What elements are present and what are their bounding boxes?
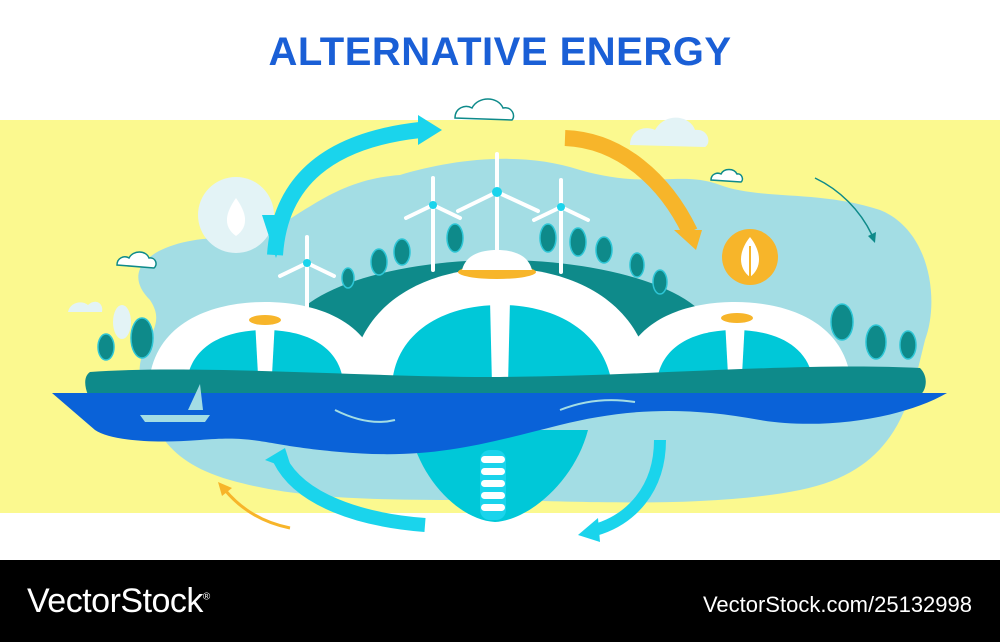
arrows: [262, 115, 442, 258]
underwater pod: [410, 430, 588, 522]
footer brand: VectorStock®: [27, 582, 210, 620]
footer: [0, 560, 1000, 642]
water: [52, 393, 947, 454]
trees: [98, 224, 916, 360]
title: ALTERNATIVE ENERGY: [268, 30, 732, 74]
clouds: [117, 99, 742, 268]
background blob: [138, 159, 931, 503]
ground strip: [85, 367, 926, 395]
domes: [150, 250, 850, 385]
footer url: VectorStock.com/25132998: [703, 592, 972, 617]
boat: [140, 384, 210, 422]
central hill: [285, 260, 715, 420]
wind turbines: [280, 154, 588, 310]
leaf icon orange: [722, 229, 778, 285]
sun icon: [198, 177, 274, 253]
